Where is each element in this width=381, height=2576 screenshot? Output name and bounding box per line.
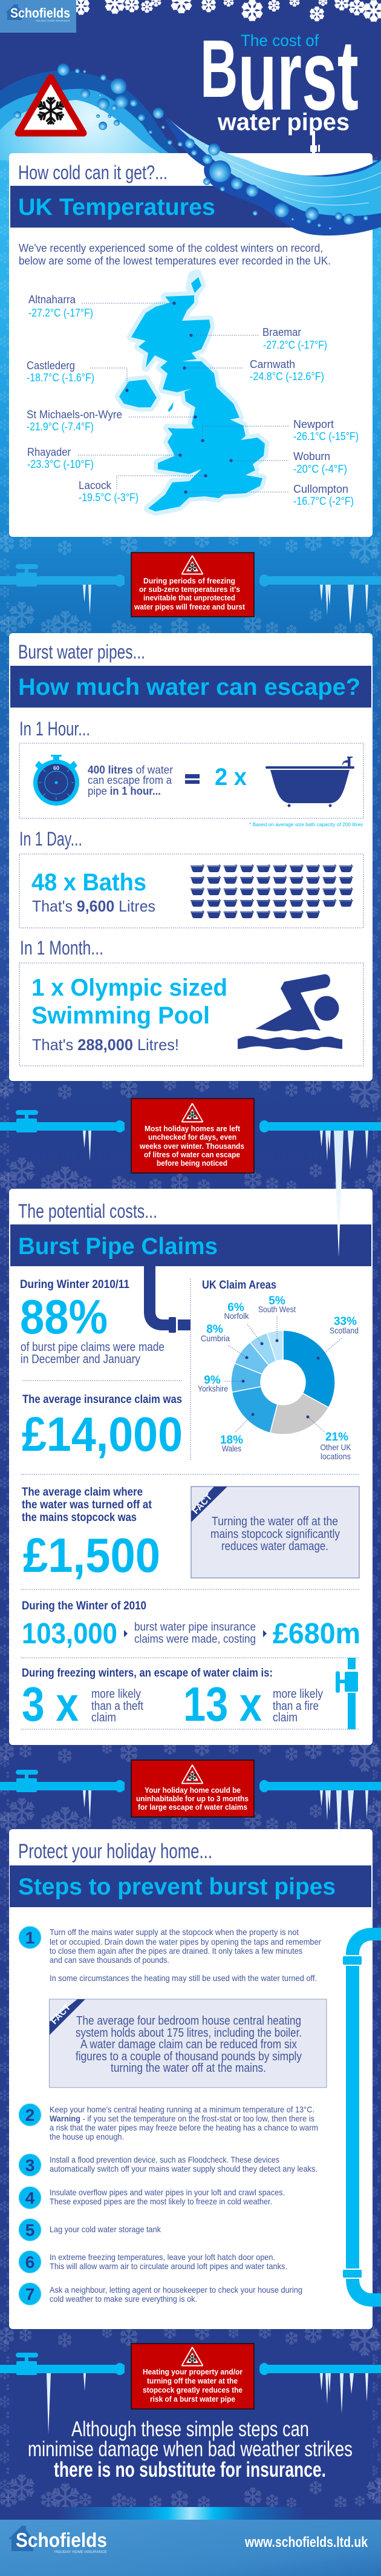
step 4: Insulate overflow pipes and water pipes in your loft and crawl spaces.	[50, 2187, 285, 2197]
heading bar: burst pipe claims: Burst Pipe Claims	[18, 1234, 218, 1260]
callout: heating sign: stopcock greatly reduces the	[143, 2385, 243, 2394]
label: St Michaels-on-Wyre: -21.9°C (-7.4°F)	[27, 421, 94, 433]
stat: £1,500: £1,500	[23, 1528, 160, 1582]
label: Altnaharra: Altnaharra	[28, 294, 76, 306]
title: urst	[238, 20, 359, 131]
label: Carnwath: Carnwath	[250, 358, 295, 370]
label: Altnaharra: -27.2°C (-17°F)	[28, 307, 93, 319]
label: Braemar: -27.2°C (-17°F)	[263, 339, 327, 351]
fact box: central heating	[49, 1999, 327, 2088]
logo: Schofields footer	[8, 2526, 107, 2554]
callout: heating sign: Heating your property and/or	[143, 2367, 243, 2376]
map location dots	[125, 301, 233, 494]
fact box: stopcock: FACT	[190, 1492, 214, 1516]
label: Wales	[220, 1434, 243, 1453]
label: Yorkshire	[198, 1374, 228, 1393]
label: Carnwath: -24.8°C (-12.6°F)	[250, 370, 324, 383]
heading bar: how much water	[10, 666, 371, 708]
label: Braemar: Braemar	[262, 326, 301, 338]
label: Other UK: Other UK	[321, 1442, 351, 1452]
callout: holiday homes sign: before being noticed	[157, 1158, 227, 1168]
fact box: stopcock: mains stopcock significantly	[210, 1528, 340, 1541]
callout: uninhabitable sign	[131, 1760, 254, 1817]
pipes band 3	[0, 1770, 381, 1830]
callout: heating sign	[131, 2344, 254, 2409]
step 3: 3	[25, 2156, 34, 2175]
heading bar: steps: Steps to prevent burst pipes	[18, 1874, 336, 1900]
stat: £680m: £680m	[273, 1618, 360, 1650]
label: Other UK: 21%	[325, 1431, 348, 1444]
callout: heating sign: turning off the water at the	[147, 2376, 238, 2385]
heading: how cold: How cold can it get?...	[18, 162, 168, 183]
dotted box: day	[19, 854, 363, 928]
pipe with valve	[336, 1658, 358, 1729]
text: claims made: burst water pipe insurance	[134, 1621, 256, 1634]
heading: in 1 day: In 1 Day...	[19, 828, 82, 850]
callout: freezing warning sign: inevitable that unprotected	[143, 593, 235, 602]
callout: freezing warning sign	[131, 553, 254, 617]
heading: protect: Protect your holiday home...	[18, 1840, 212, 1863]
heading: in 1 month: In 1 Month...	[20, 937, 103, 959]
label: Wales: 18%	[220, 1434, 243, 1447]
text: 400 litres: 400 litres of water	[88, 764, 173, 776]
callout: holiday homes sign	[131, 1099, 254, 1173]
water splash behind panel	[0, 71, 187, 160]
step 3: Install a flood prevention device, such as Floodcheck. These devices	[50, 2155, 279, 2164]
callout: holiday homes sign: Most holiday homes are left	[145, 1124, 241, 1133]
callout: holiday homes sign: unchecked for days, even	[148, 1132, 236, 1142]
snowflake garland	[73, 0, 381, 21]
text: 9,600 litres: That's 9,600 Litres	[32, 897, 155, 915]
title: The cost of	[241, 31, 319, 50]
text: olympic pool: Swimming Pool	[31, 1002, 210, 1029]
step 1: and can save thousands of pounds.	[50, 1955, 169, 1965]
text: theft claim: claim	[91, 1711, 116, 1724]
text: 48 baths: 48 x Baths	[31, 869, 146, 896]
label: Norfolk: 6%	[227, 1301, 244, 1314]
dotted map connectors	[78, 303, 288, 492]
text: stopcock claim	[22, 1486, 152, 1524]
text: theft claim: than a theft	[91, 1700, 143, 1713]
text: stopcock claim: The average claim where	[22, 1486, 143, 1499]
step 1: to close them again after the pipes are drained. It only takes a few minutes	[50, 1946, 302, 1956]
step 1: In some circumstances the heating may still be used with the water turned off.	[50, 1973, 317, 1983]
label: Lacock: -19.5°C (-3°F)	[79, 491, 138, 504]
step 3	[18, 2154, 318, 2177]
heading: burst water pipes: Burst water pipes...	[18, 641, 145, 663]
heading bar: burst pipe claims	[10, 1224, 371, 1266]
stat: £14,000: £14,000	[22, 1407, 183, 1461]
water wave ribbon	[165, 118, 381, 235]
label: Cumbria: 8%	[206, 1323, 223, 1336]
text: burst pipe claims	[21, 1341, 164, 1366]
step 1: 1	[25, 1928, 34, 1947]
callout: uninhabitable sign: for large escape of water claims	[138, 1802, 247, 1812]
label: Cullompton	[293, 483, 354, 507]
water bubbles	[14, 64, 368, 229]
stat: 3 x: 3 x	[22, 1677, 79, 1731]
pipes band 1	[0, 564, 381, 624]
pipes band 2	[0, 1110, 381, 1170]
text: claims made	[134, 1621, 256, 1646]
step 7: Ask a neighbour, letting agent or housekeeper to check your house during	[50, 2285, 302, 2295]
text: olympic pool	[31, 974, 227, 1029]
step 5: 5	[25, 2221, 34, 2239]
intro text: We've recently experienced some of the coldest winters on record,	[19, 242, 323, 254]
fact box: central heating: FACT	[49, 2002, 73, 2026]
text: during winter: During Winter 2010/11	[20, 1278, 129, 1291]
logo: Schofields top	[0, 0, 76, 33]
callout: holiday homes sign: of litres of water can escape	[144, 1150, 240, 1159]
step 2: Keep your home's central heating running at a minimum temperature of 13°C.	[50, 2104, 314, 2114]
icon: bath	[265, 757, 354, 807]
intro text: below are some of the lowest temperatures ever recorded in the UK.	[19, 255, 331, 267]
logo: Schofields top: HOLIDAY HOME INSURANCE	[36, 19, 70, 22]
icon: stopwatch: 60	[53, 765, 59, 771]
label: Castlederg	[27, 360, 94, 384]
panel backgrounds' snow rows	[0, 533, 381, 2511]
heading bar: UK temperatures	[10, 186, 371, 228]
step 1	[18, 1926, 321, 1983]
donut connectors	[224, 1316, 342, 1433]
step 7: cold weather to make sure everything is ok.	[50, 2294, 197, 2304]
label: Carnwath	[250, 358, 324, 383]
label: South West	[258, 1295, 296, 1314]
long icicle band 3	[336, 1790, 342, 1849]
label: Rhayader	[27, 446, 94, 470]
label: South West: 5%	[269, 1295, 285, 1307]
step 4	[18, 2186, 285, 2209]
map of the UK	[119, 274, 265, 511]
step 6	[18, 2250, 287, 2273]
step 5: Lag your cold water storage tank	[50, 2224, 161, 2234]
arrow	[263, 1630, 267, 1637]
fact box: stopcock	[190, 1487, 359, 1578]
step 7: 7	[25, 2285, 34, 2304]
fact box: central heating: turning the water off at the mains.	[111, 2062, 266, 2075]
logo: Schofields footer: Schofields	[16, 2529, 107, 2551]
equals sign	[185, 774, 200, 784]
label: Rhayader: Rhayader	[27, 446, 71, 458]
label: Yorkshire: Yorkshire	[198, 1384, 228, 1393]
glow strip	[0, 2507, 381, 2520]
callout: heating sign: risk of a burst water pipe	[150, 2394, 235, 2404]
callout: uninhabitable sign: Your holiday home could be	[145, 1786, 241, 1795]
fact box: central heating: A water damage claim can be reduced from six	[80, 2038, 297, 2051]
text: freezing winters: During freezing winters, an escape of water claim is:	[22, 1667, 273, 1680]
long icicle band 2	[334, 1131, 344, 1257]
label: Other UK: locations	[321, 1451, 351, 1461]
text: burst pipe claims: of burst pipe claims were made	[21, 1341, 164, 1354]
step 5	[18, 2218, 161, 2241]
heading: in 1 hour: In 1 Hour...	[19, 718, 90, 740]
text: winter of 2010: During the Winter of 2010	[22, 1600, 146, 1612]
dotted box: month	[19, 963, 363, 1066]
footer	[0, 2520, 381, 2576]
text: theft claim	[91, 1687, 143, 1724]
footnote: * Based on average size bath capacity of 200 litres	[249, 822, 363, 827]
text: olympic pool: 1 x Olympic sized	[31, 974, 227, 1001]
label: Norfolk: Norfolk	[224, 1311, 249, 1321]
text: 400 litres: pipe in 1 hour...	[88, 785, 161, 797]
text: 400 litres	[88, 764, 173, 797]
text: stopcock claim: the mains stopcock was	[22, 1511, 137, 1524]
title: B	[200, 24, 238, 115]
step 7	[18, 2282, 302, 2305]
label: Lacock: Lacock	[79, 479, 112, 491]
text: fire claim: more likely	[273, 1687, 323, 1701]
icon: warning triangle	[18, 77, 83, 133]
step 4: These exposed pipes are the most likely to freeze in cold weather.	[50, 2196, 272, 2206]
heading bar: UK temperatures: UK Temperatures	[18, 194, 215, 220]
closing statement: Although these simple steps can	[71, 2417, 309, 2441]
text: claims made: claims were made, costing	[134, 1633, 256, 1646]
step 1: Turn off the mains water supply at the stopcock when the property is not	[50, 1927, 299, 1937]
heading: potential costs: The potential costs...	[18, 1200, 157, 1222]
step 6: This will allow warm air to circulate around loft pipes and water tanks.	[50, 2261, 287, 2271]
callout: holiday homes sign: weeks over winter. Thousands	[139, 1142, 244, 1151]
right pipe	[343, 1928, 381, 2307]
label: Yorkshire: 9%	[204, 1374, 221, 1387]
step 2: Warning - if you set the temperature on the frost-stat or too low, then there is	[50, 2114, 314, 2123]
label: Newport: Newport	[293, 418, 334, 430]
label: Cullompton: -16.7°C (-2°F)	[293, 495, 354, 507]
text: fire claim: than a fire	[273, 1700, 319, 1713]
logo: Schofields top: Schofields	[10, 5, 70, 21]
label: Altnaharra	[28, 294, 93, 319]
text: theft claim: more likely	[91, 1687, 141, 1701]
text: fire claim	[273, 1687, 323, 1724]
panel: UK temperatures	[9, 153, 373, 537]
callout: freezing warning sign: or sub-zero temperatures it's	[139, 585, 240, 594]
intro text	[19, 242, 331, 267]
arrow	[124, 1630, 128, 1637]
stat: 13 x: 13 x	[183, 1677, 262, 1731]
icon: stopwatch	[33, 755, 79, 806]
label: Norfolk	[224, 1301, 249, 1321]
step 4: 4	[25, 2189, 35, 2207]
step 2	[18, 2103, 318, 2141]
title: water pipes	[217, 109, 350, 136]
label: Castlederg: Castlederg	[27, 360, 75, 372]
title pipe with valve	[310, 131, 320, 176]
icon: swimmer	[238, 974, 342, 1050]
chart: 48 baths grid	[190, 864, 353, 918]
label: Newport: -26.1°C (-15°F)	[293, 430, 359, 442]
fact box: stopcock: Turning the water off at the	[212, 1515, 338, 1528]
dotted box: hour	[19, 743, 363, 818]
label: Other UK	[321, 1431, 351, 1461]
text: 288,000 litres: That's 288,000 Litres!	[32, 1036, 179, 1054]
step 6: 6	[25, 2253, 34, 2272]
label: Lacock	[79, 479, 138, 504]
fact box: stopcock: reduces water damage.	[221, 1540, 328, 1553]
label: Wales: Wales	[222, 1444, 241, 1453]
stat: 103,000: 103,000	[22, 1618, 117, 1650]
label: Cullompton: Cullompton	[293, 483, 348, 495]
text: fire claim: claim	[273, 1711, 298, 1724]
callout: uninhabitable sign: uninhabitable for up to 3 months	[136, 1794, 249, 1803]
text: average claim: The average insurance claim was	[22, 1393, 182, 1406]
pipes band 4	[0, 2353, 381, 2434]
fact box: central heating: system holds about 175 litres, including the boiler.	[76, 2026, 302, 2040]
panel: steps to prevent	[9, 1829, 381, 2329]
label: Rhayader: -23.3°C (-10°F)	[27, 458, 94, 470]
label: Cumbria: Cumbria	[201, 1333, 230, 1343]
label: South West: South West	[258, 1304, 296, 1314]
heading: UK claim areas: UK Claim Areas	[202, 1279, 276, 1292]
step 2: the house up enough.	[50, 2132, 124, 2141]
donut chart	[231, 1330, 335, 1434]
label: Scotland: Scotland	[330, 1326, 359, 1335]
label: Woburn	[293, 450, 347, 475]
label: Newport	[293, 418, 359, 442]
stat: 88%: 88%	[20, 1290, 108, 1344]
fact box: central heating: figures to a couple of thousand pounds by simply	[76, 2050, 302, 2063]
label: St Michaels-on-Wyre: St Michaels-on-Wyre	[27, 409, 122, 421]
heading bar: how much water: How much water can escape?	[18, 674, 360, 700]
panel: how much water	[9, 633, 373, 1081]
label: Woburn: Woburn	[293, 450, 330, 462]
step 2: a risk that the water pipes may freeze before the heating has a chance to warm	[50, 2123, 318, 2132]
text: 400 litres: can escape from a	[88, 774, 172, 786]
closing statement	[28, 2417, 353, 2482]
label: Scotland: 33%	[334, 1315, 357, 1328]
label: Castlederg: -18.7°C (-1.6°F)	[27, 372, 94, 384]
logo: Schofields footer: HOLIDAY HOME INSURANCE	[54, 2551, 107, 2554]
step 6: In extreme freezing temperatures, leave your loft hatch door open.	[50, 2252, 275, 2262]
callout: freezing warning sign: During periods of freezing	[143, 576, 235, 585]
fact box: central heating: The average four bedroom house central heating	[76, 2014, 301, 2028]
label: Scotland	[330, 1315, 359, 1335]
label: Braemar	[262, 326, 327, 351]
text: 2 x: 2 x	[215, 764, 247, 790]
panel: burst pipe claims	[9, 1189, 373, 1745]
text: stopcock claim: the water was turned off at	[22, 1499, 152, 1511]
label: Woburn: -20°C (-4°F)	[293, 463, 347, 475]
label: St Michaels-on-Wyre	[27, 409, 122, 433]
step 1: let or occupied. Drain down the water pipes by opening the taps and remember	[50, 1937, 321, 1947]
callout: freezing warning sign: water pipes will freeze and burst	[134, 602, 246, 611]
label: Cumbria	[201, 1323, 230, 1343]
text: burst pipe claims: in December and January	[21, 1353, 140, 1366]
step 3: automatically switch off your mains water supply should they detect any leaks.	[50, 2164, 318, 2174]
heading bar: steps	[10, 1865, 371, 1907]
step 2: 2	[25, 2106, 34, 2124]
pipe from heading	[144, 1266, 190, 1333]
